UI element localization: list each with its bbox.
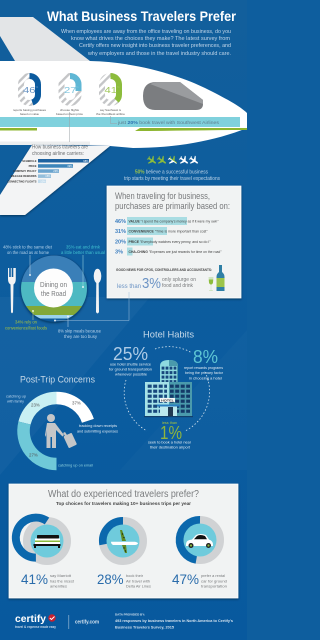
less than 3% stat bbox=[117, 275, 196, 292]
dining stat: 35%: a little better than usual bbox=[61, 250, 105, 255]
bar chart: airline carriers: 68% bbox=[83, 159, 89, 163]
post-trip label: family bbox=[6, 394, 27, 403]
stat: 41% southwest: say Southwest is bbox=[100, 108, 121, 112]
bar chart: airline carriers: 39% bbox=[67, 164, 73, 168]
post-trip label: receipts: tracking down receipts bbox=[79, 423, 117, 428]
stat: 41% southwest: % bbox=[117, 85, 120, 89]
chart: dining plate bbox=[20, 255, 88, 322]
bar chart: airline carriers: How business travelers are bbox=[32, 144, 88, 150]
dashed hotel circle bbox=[124, 347, 210, 431]
footer url: certify.com bbox=[75, 620, 99, 626]
intro text: know what drives the choices they make? The latest survey from bbox=[71, 36, 230, 42]
row: value bbox=[115, 217, 219, 225]
stat: 27% price: choose flights bbox=[60, 108, 80, 112]
icon: traveler with suitcase bbox=[45, 414, 77, 448]
hotel stat: 25%: whenever possible bbox=[115, 372, 148, 376]
bar chart: airline carriers: 10% bbox=[40, 179, 46, 183]
stat: 46% value: % bbox=[36, 85, 38, 89]
stat: 28% delta: Air travel with bbox=[126, 578, 150, 583]
hotel stat: 8%: report rewards programs bbox=[184, 365, 223, 370]
less than 3% stat: food and drink bbox=[162, 283, 193, 289]
donut: plane 28% bbox=[103, 521, 143, 561]
bar chart: airline carriers: 23% bbox=[53, 169, 59, 173]
hotel stat: 25%: for ground transportation bbox=[109, 366, 152, 372]
post-trip label: receipts: and submitting expenses bbox=[77, 428, 118, 434]
panel subheading: Top choices for travelers making 10+ business trips per year bbox=[56, 501, 191, 506]
plate label bbox=[40, 282, 67, 298]
icon: plane bbox=[111, 530, 138, 553]
icon: hotel bbox=[144, 360, 193, 417]
southwest stripe text: just 20% book travel with Southwest Airlines bbox=[117, 120, 220, 126]
bar chart: airline carriers: choosing airline carriers: bbox=[32, 151, 84, 157]
ring values: 27% bbox=[29, 452, 38, 458]
stat: 46% value: 46 bbox=[23, 85, 36, 95]
icon: five planes bbox=[145, 154, 201, 167]
row: cha-ching: 3% bbox=[115, 250, 123, 256]
hotel stat: 1%: their destination airport bbox=[150, 444, 191, 450]
row: price: PRICE "Everybody watches every penny, and so do I" bbox=[128, 240, 211, 244]
bar chart: airline carriers bbox=[7, 144, 89, 183]
chart: post-trip ring bbox=[24, 398, 88, 464]
stat: 46% value: based on value bbox=[20, 112, 39, 116]
stat: 41% southwest bbox=[96, 76, 125, 116]
stat: 28% delta: 28% bbox=[97, 571, 124, 587]
airplane illustration bbox=[0, 17, 247, 215]
background bbox=[0, 0, 247, 640]
icon: hotel: HOTEL bbox=[161, 398, 174, 402]
dining stat: 48%: 48% stick to the same diet bbox=[3, 244, 53, 250]
bar chart: airline carriers: 15% bbox=[45, 174, 51, 178]
post-trip label: receipts bbox=[77, 423, 118, 434]
panel: experienced travelers bbox=[9, 484, 238, 598]
hotel stat: 25% bbox=[109, 344, 152, 376]
stat: 41% marriott: has the nicest bbox=[50, 578, 75, 583]
row: convenience: 31% bbox=[115, 229, 126, 235]
stat: 28% delta: book their bbox=[126, 573, 144, 578]
stat: 27% price: 27 bbox=[64, 85, 77, 95]
bar chart: airline carriers: PRICE bbox=[29, 164, 37, 168]
stat: 41% southwest: 41 bbox=[104, 85, 117, 95]
plate label: Dining on bbox=[40, 282, 67, 289]
50% travel expectations text: 50% believe a successful business bbox=[135, 170, 208, 176]
dining stat: 34%: 34% rely on bbox=[15, 320, 38, 324]
row: price: 20% bbox=[115, 240, 126, 246]
icon: car bbox=[186, 534, 213, 548]
stat: 28% delta: Delta Air Lines bbox=[126, 584, 151, 588]
icon: spoon bbox=[94, 269, 101, 314]
hotel stat: 25%: 25% bbox=[113, 344, 148, 364]
dining callout lines bbox=[29, 255, 129, 327]
stat: 27% price: % bbox=[76, 85, 79, 89]
row: cha-ching: CHA-CHING "Expenses are just rewards for time on the road" bbox=[128, 250, 222, 254]
bar chart: airline carriers: CONNECTING FLIGHTS bbox=[7, 179, 37, 183]
bar chart: airline carriers: COMPANY POLICY bbox=[13, 169, 37, 173]
stat: 47% rental: car for ground bbox=[201, 578, 227, 583]
row: value: 46% bbox=[115, 219, 126, 225]
ring values: 37% bbox=[72, 400, 81, 406]
title: What Business Travelers Prefer bbox=[47, 9, 237, 24]
stat: 46% value bbox=[13, 76, 46, 116]
hotel stat: 1%: 1% bbox=[160, 423, 182, 443]
less than 3% stat: 3% bbox=[142, 275, 161, 292]
stat: 47% rental: 47% bbox=[172, 571, 199, 587]
footer source note bbox=[115, 612, 233, 629]
stat: 47% rental: prefer a rental bbox=[201, 573, 225, 578]
donut: hotel 41% bbox=[16, 518, 67, 561]
row: convenience bbox=[115, 227, 208, 235]
hotel stat: 8%: in choosing a hotel bbox=[189, 376, 222, 380]
footer divider bbox=[68, 615, 70, 629]
footer logo: certify: certify bbox=[15, 614, 46, 625]
less than 3% stat: less than bbox=[117, 283, 141, 290]
footer logo: certify bbox=[15, 614, 56, 629]
intro text: why employers and those in the travel industry should care. bbox=[88, 51, 231, 57]
ring values bbox=[29, 400, 81, 458]
stat: 47% rental: transportation bbox=[201, 584, 227, 588]
stat: 28% delta bbox=[97, 571, 151, 588]
hotel stat: 8%: being the primary factor bbox=[185, 370, 224, 375]
intro text: When employees are away from the office traveling on business, do you bbox=[61, 29, 231, 35]
intro text bbox=[61, 29, 231, 57]
heading: post-trip concerns: Post-Trip Concerns bbox=[20, 374, 95, 384]
hotel stat: 1%: less than bbox=[162, 420, 177, 425]
panel heading bbox=[115, 191, 230, 212]
dining stat: 34%: convenience/fast foods bbox=[5, 326, 48, 330]
icon: fork bbox=[8, 268, 16, 313]
stat: 27% price bbox=[56, 76, 83, 116]
post-trip label: family: catching up bbox=[6, 394, 27, 398]
row: value: VALUE "I spend the company's money as if it were my own" bbox=[128, 220, 219, 224]
stat: 41% marriott: say Marriott bbox=[50, 573, 72, 578]
dining stat: 8%: 8% skip meals because bbox=[58, 328, 102, 334]
stat: 41% marriott: 41% bbox=[21, 571, 48, 587]
ring values: 23% bbox=[31, 402, 40, 408]
dining stat: 35% bbox=[61, 244, 105, 255]
hotel stat: 1% bbox=[148, 420, 192, 450]
dining stat: 35%: 35% eat and drink bbox=[66, 244, 101, 250]
hotel stat: 8% bbox=[184, 347, 224, 380]
stat: 41% southwest: the friendliest airline bbox=[96, 112, 125, 116]
panel heading: When traveling for business, bbox=[115, 191, 210, 202]
stat: 46% value: reports basing purchases bbox=[13, 108, 46, 112]
stat: 41% marriott bbox=[21, 571, 75, 588]
50% travel expectations text bbox=[124, 170, 220, 182]
stat: 41% marriott: amenities bbox=[50, 584, 67, 588]
dining stat: 48% bbox=[3, 244, 53, 255]
footer source note: 493 responses by business travelers in North America to Certify's bbox=[115, 619, 233, 623]
footer logo: certify: travel & expense made easy bbox=[15, 625, 56, 629]
bar chart: airline carriers: MILEAGE REWARDS bbox=[11, 174, 37, 178]
panel heading: What do experienced travelers prefer? bbox=[48, 489, 200, 500]
panel: purchases bbox=[107, 186, 241, 298]
heading: hotel habits: Hotel Habits bbox=[143, 330, 194, 340]
dining stat: 48%: on the road as at home bbox=[7, 250, 50, 255]
hotel stat: 1%: seek to book a hotel near bbox=[148, 440, 192, 444]
row: cha-ching bbox=[115, 248, 222, 256]
plate label: the Road bbox=[41, 291, 66, 298]
stat: 27% price: based on best price bbox=[56, 112, 83, 116]
hotel stat: 25%: use hotel shuttle service bbox=[110, 362, 152, 366]
icon: bed bbox=[34, 535, 60, 548]
good news heading: GOOD NEWS FOR CFOS, CONTROLLERS AND ACCOUNTANTS: bbox=[116, 268, 212, 272]
less than 3% stat: only splurge on bbox=[162, 277, 196, 283]
intro text: Certify offers new insight into business traveler preferences, and bbox=[79, 43, 231, 49]
50% travel expectations text: trip starts by meeting their travel expectations bbox=[124, 176, 220, 182]
row: convenience: CONVENIENCE "Time is more important than cost" bbox=[128, 230, 208, 234]
post-trip label: family: with family bbox=[7, 398, 24, 403]
donut: car 47% bbox=[180, 520, 220, 560]
dining stat: 8% bbox=[58, 328, 102, 339]
footer source note: Business Travelers Survey, 2015 bbox=[115, 625, 174, 629]
stat: 47% rental bbox=[172, 571, 227, 588]
dining stat: 34% bbox=[5, 320, 48, 330]
row: price bbox=[115, 238, 211, 246]
hotel stat: 8%: 8% bbox=[193, 347, 218, 367]
footer source note: DATA PROVIDED BY: bbox=[115, 612, 145, 616]
post-trip label: email: catching up on email bbox=[58, 462, 93, 468]
bar chart: airline carriers: SCHEDULE bbox=[22, 159, 37, 163]
dining stat: 8%: they are too busy bbox=[64, 334, 98, 339]
icon: wine bottle and glass bbox=[208, 265, 224, 291]
